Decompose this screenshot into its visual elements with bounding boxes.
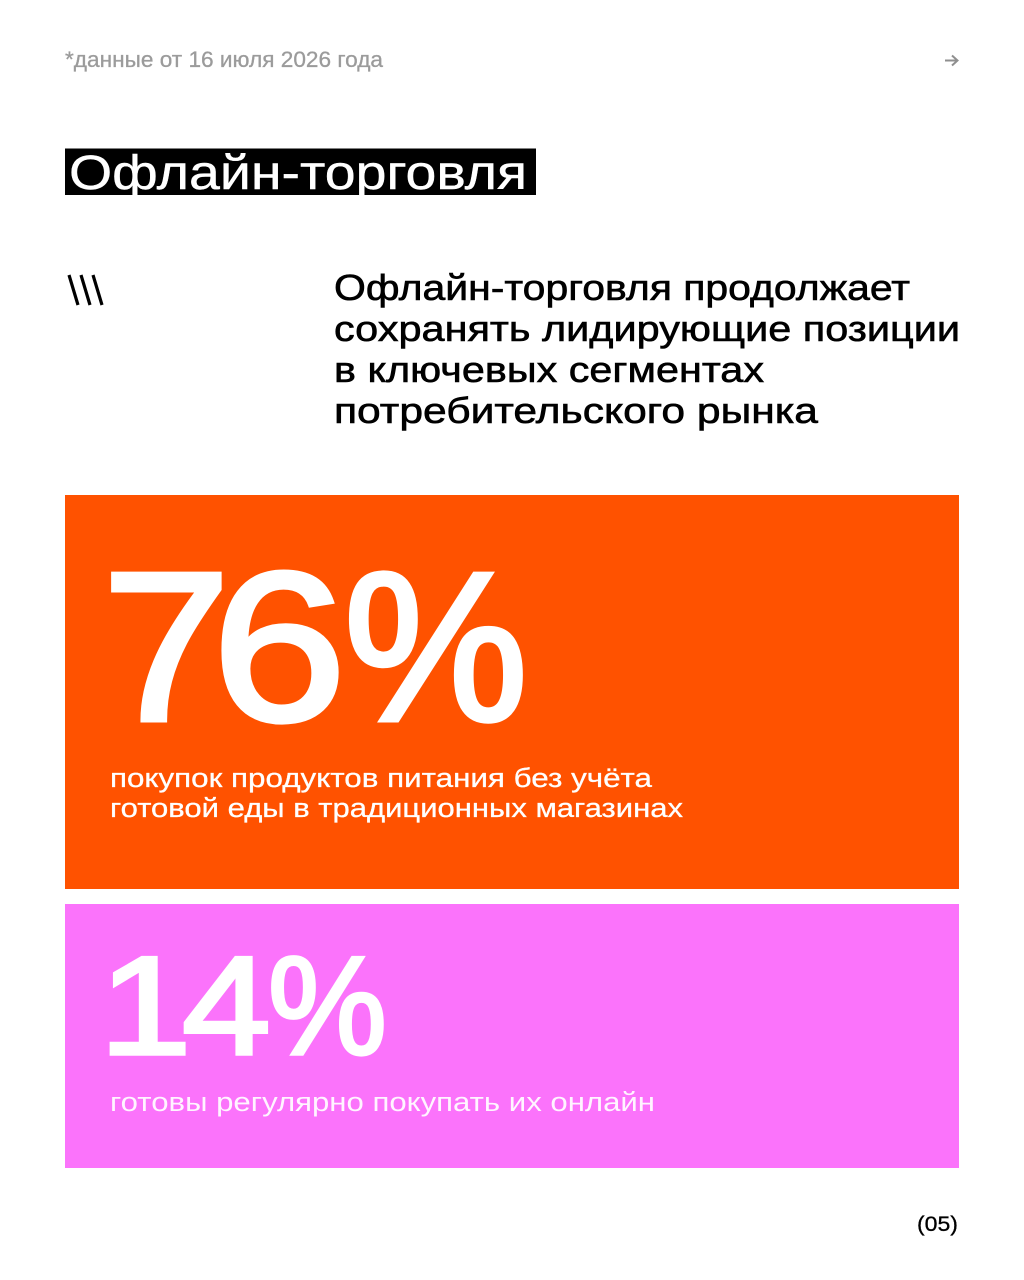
heading: Офлайн-торговля xyxy=(69,147,527,200)
caption: 76%: покупок продуктов питания без учёта xyxy=(110,763,653,793)
stat: 76% xyxy=(102,528,528,766)
panel: 76% xyxy=(65,495,959,889)
icon: arrow xyxy=(945,56,958,66)
stat: 76%: 6 xyxy=(212,529,346,766)
panel: 14% xyxy=(65,904,959,1168)
stat: 76%: 7 xyxy=(102,528,231,765)
stat: 76%: % xyxy=(344,529,528,766)
stat: 14%: 4 xyxy=(182,927,271,1084)
stat: 14%: 1 xyxy=(99,928,192,1084)
date note: *данные от 16 июля 2026 года xyxy=(65,47,384,72)
stat: 14%: % xyxy=(268,928,387,1085)
caption: 76% xyxy=(110,763,684,823)
intro text xyxy=(334,267,960,431)
intro text: сохранять лидирующие позиции xyxy=(334,308,960,349)
caption: 14%: готовы регулярно покупать их онлайн xyxy=(110,1087,655,1117)
intro text: Офлайн-торговля продолжает xyxy=(334,267,910,308)
intro text: потребительского рынка xyxy=(334,390,819,431)
decorative slashes mark xyxy=(69,275,102,305)
page number: (05) xyxy=(917,1213,958,1236)
caption: 76%: готовой еды в традиционных магазинах xyxy=(110,793,684,823)
stat: 14% xyxy=(99,927,387,1085)
intro text: в ключевых сегментах xyxy=(334,349,764,390)
